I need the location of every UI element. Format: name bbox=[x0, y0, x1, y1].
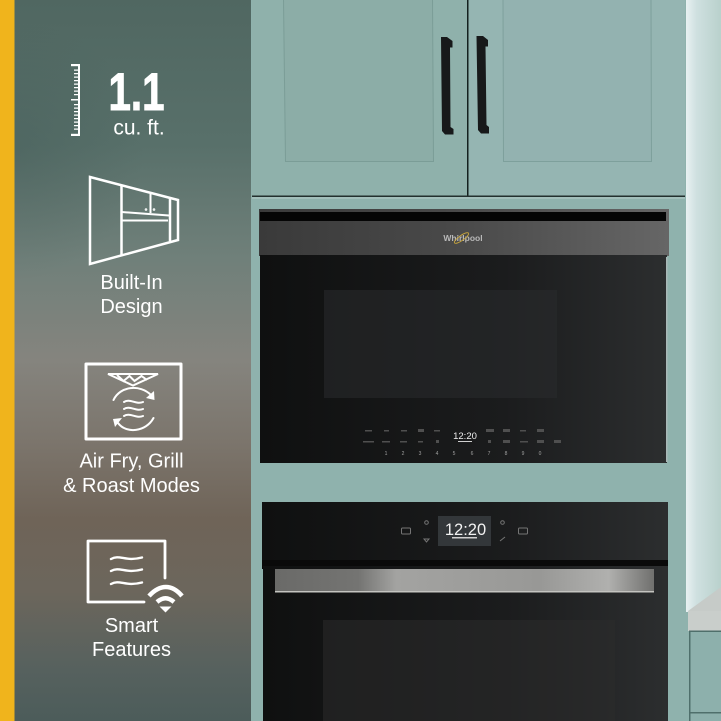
microwave door bbox=[260, 255, 667, 463]
icon: smart features bbox=[88, 541, 182, 612]
oven display: 12:20 bbox=[445, 521, 486, 539]
label: air fry, grill and roast modes: Air Fry, Grill bbox=[79, 450, 184, 472]
kitchen wall background bbox=[251, 0, 721, 721]
upper cabinet: right door bbox=[470, 0, 685, 196]
capacity unit: cu. ft. bbox=[113, 116, 165, 140]
microwave keypad numbers: 9 bbox=[522, 451, 525, 457]
microwave bbox=[259, 209, 669, 463]
label: built-in design: Design bbox=[100, 296, 163, 318]
microwave keypad numbers bbox=[385, 451, 542, 457]
label: smart features: Smart bbox=[105, 615, 159, 637]
microwave keypad numbers: 2 bbox=[402, 451, 405, 457]
microwave keypad numbers: 1 bbox=[385, 451, 388, 457]
label: built-in design: Built-In bbox=[100, 272, 163, 294]
counter and lower cabinet bbox=[688, 587, 721, 721]
oven door bbox=[263, 566, 668, 721]
wall oven bbox=[262, 502, 668, 721]
cabinet handles bbox=[441, 36, 489, 134]
microwave keypad numbers: 0 bbox=[539, 451, 542, 457]
yellow side bar bbox=[0, 0, 14, 721]
left panel background bbox=[14, 0, 251, 721]
microwave keypad numbers: 3 bbox=[419, 451, 422, 457]
oven control panel bbox=[262, 502, 668, 561]
oven display bbox=[438, 516, 491, 546]
microwave clock: 12:20 bbox=[453, 431, 477, 442]
icon: ruler bbox=[71, 64, 80, 136]
right wall strip bbox=[686, 0, 721, 612]
microwave keypad buttons bbox=[363, 429, 561, 443]
oven handle bbox=[275, 569, 654, 592]
microwave window bbox=[324, 290, 557, 398]
label: air fry, grill and roast modes: & Roast Modes bbox=[63, 475, 200, 497]
icon: air fry, grill and roast bbox=[86, 364, 181, 439]
oven touch icons bbox=[402, 521, 528, 542]
cabinet gaps bbox=[252, 0, 685, 199]
Whirlpool logo: Whirlpool bbox=[443, 233, 483, 243]
icon: built-in design bbox=[90, 177, 178, 264]
label: smart features: Features bbox=[92, 639, 171, 661]
microwave keypad numbers: 4 bbox=[436, 451, 439, 457]
microwave top band bbox=[259, 209, 669, 256]
oven window bbox=[323, 620, 615, 721]
capacity value: 1.1 bbox=[109, 62, 164, 121]
microwave keypad numbers: 8 bbox=[505, 451, 508, 457]
upper cabinet: left door bbox=[252, 0, 468, 196]
microwave keypad numbers: 5 bbox=[453, 451, 456, 457]
microwave keypad numbers: 7 bbox=[488, 451, 491, 457]
microwave keypad numbers: 6 bbox=[471, 451, 474, 457]
